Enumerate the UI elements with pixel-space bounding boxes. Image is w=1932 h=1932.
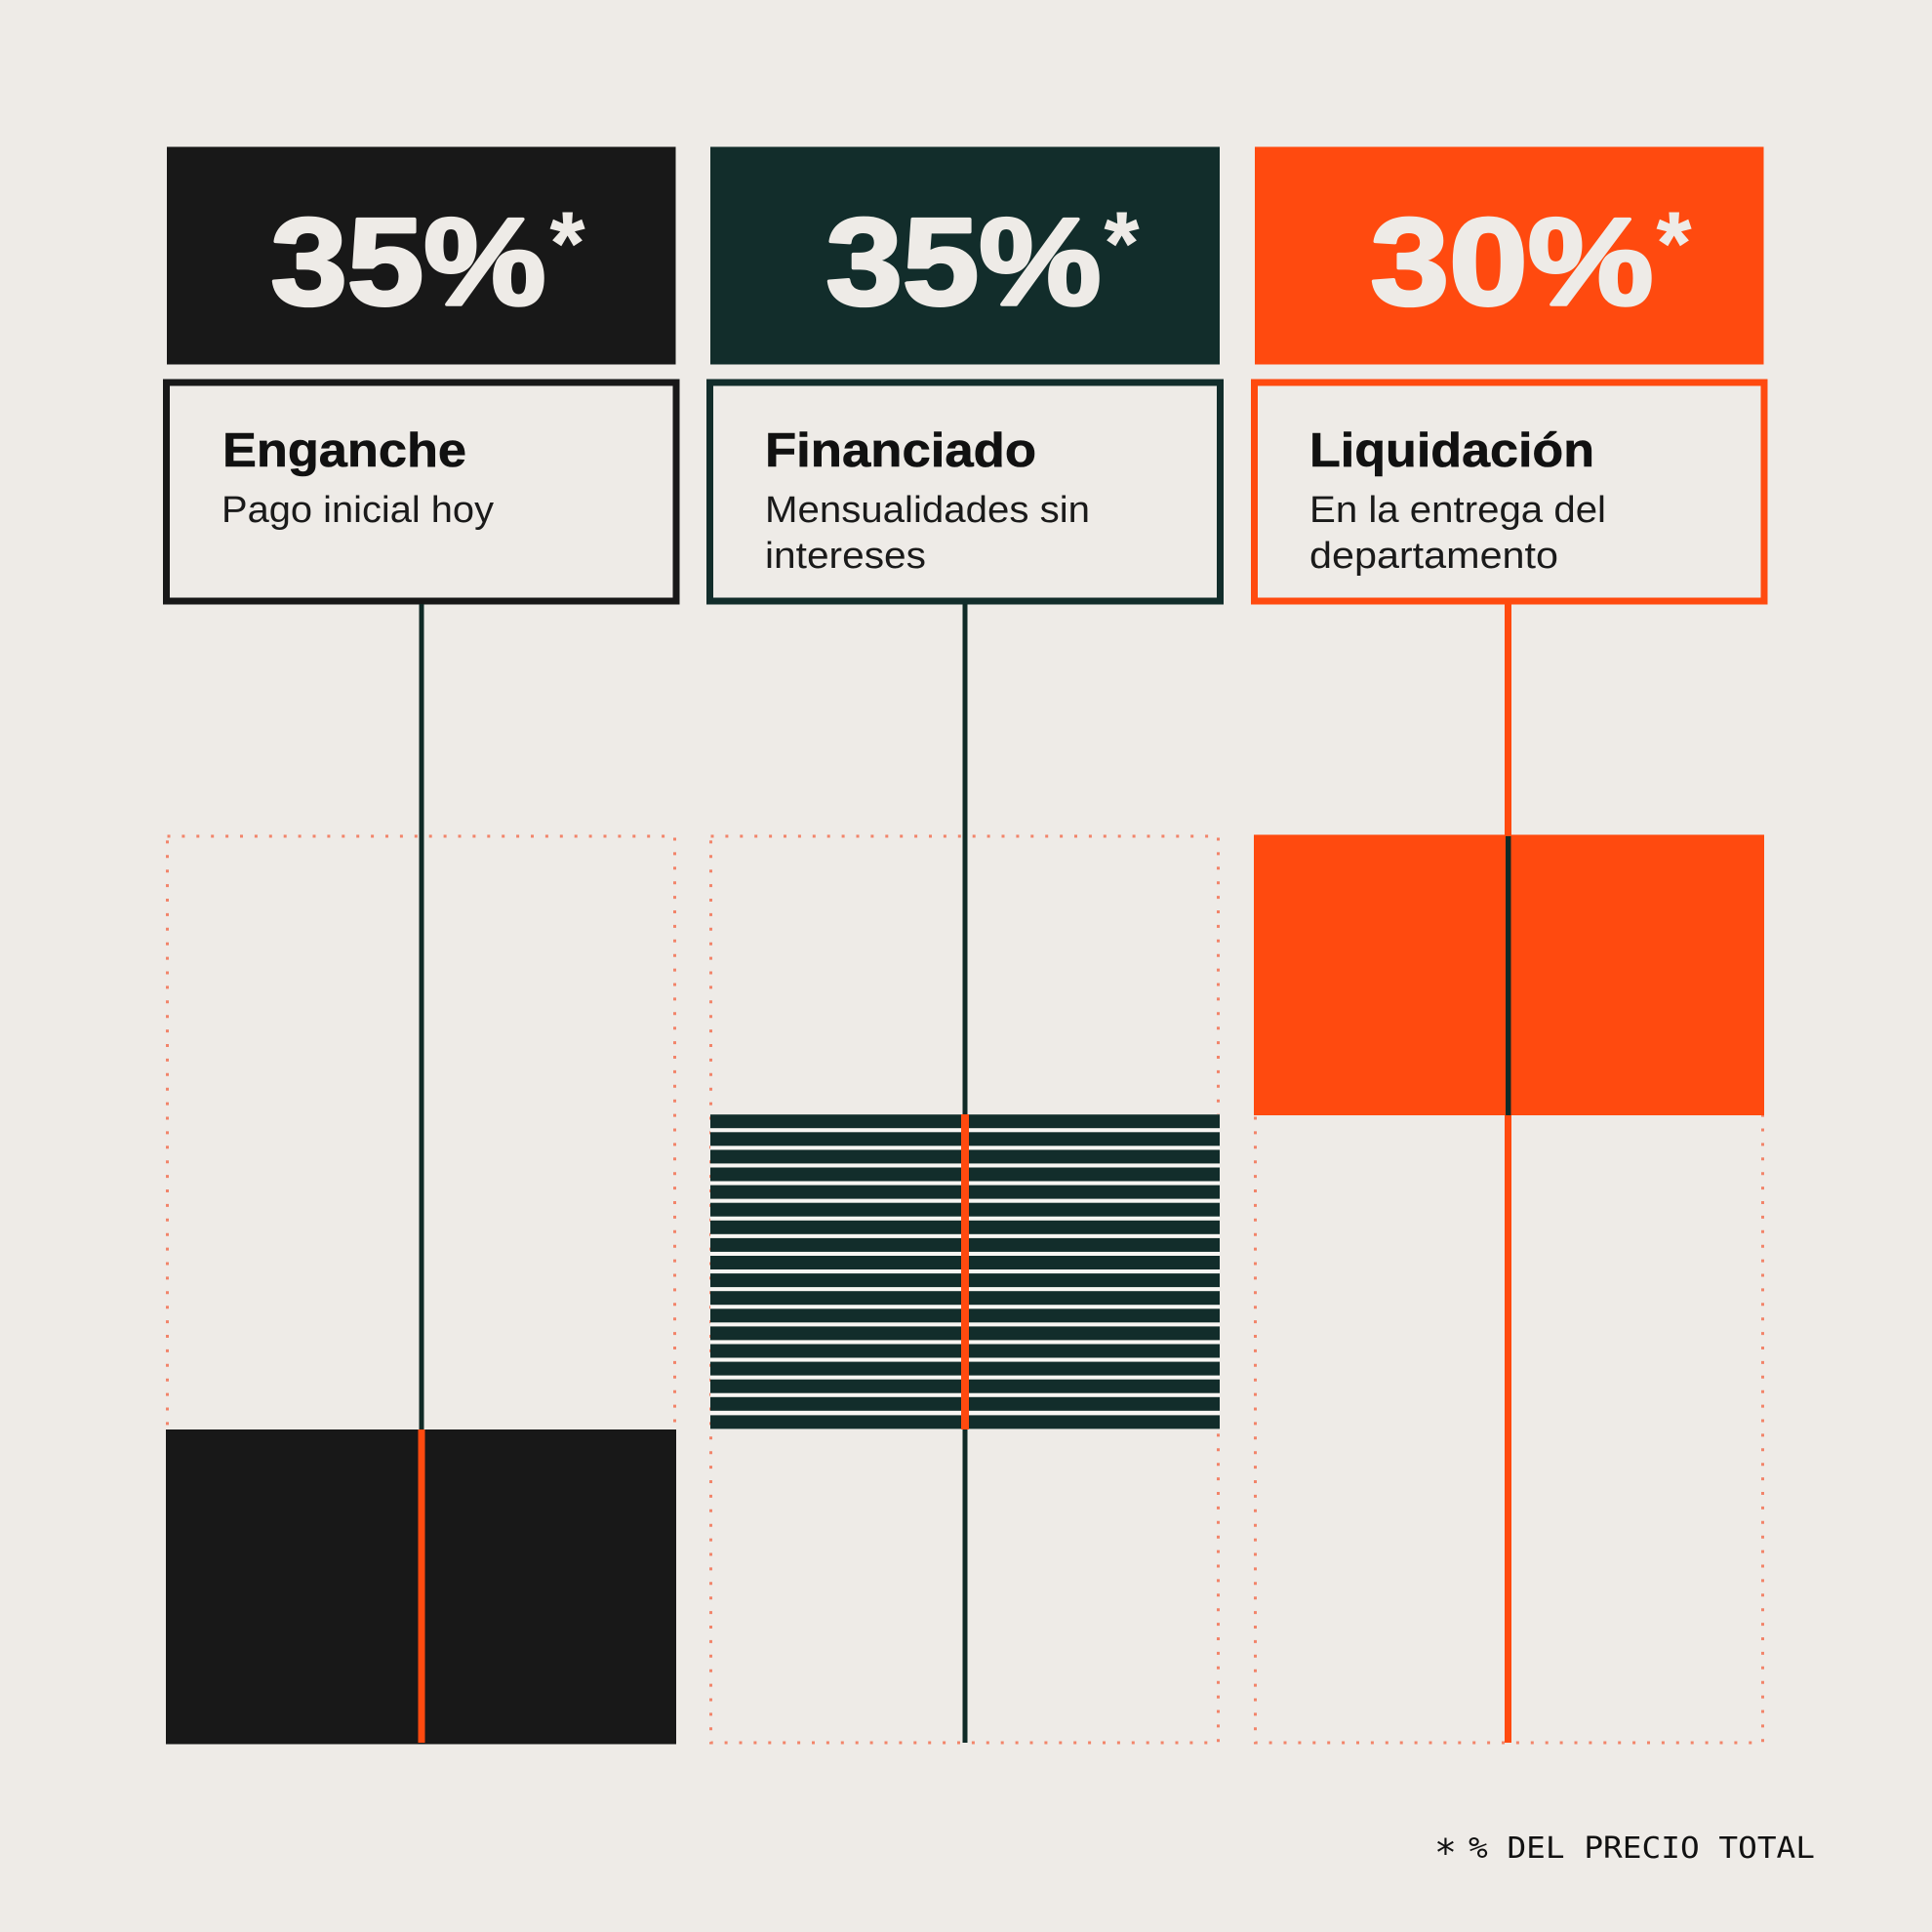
chart: Liquidación 30% bar [1254,604,1764,1743]
percentage header: 30% [1255,146,1764,365]
percentage header: 35%: 35% [825,192,1101,331]
footnote [1434,1831,1815,1874]
label box: Liquidación: En la entrega del [1309,490,1606,531]
percentage header: 30%: 30% [1370,192,1653,331]
label box: Financiado [710,382,1220,601]
label box: Liquidación: departamento [1309,536,1558,577]
label box: Liquidación [1255,382,1764,601]
percentage header: 35% [710,146,1220,365]
percentage header: 35%: * [550,195,584,293]
footnote: * [1434,1831,1457,1874]
label box: Enganche: Enganche [222,424,466,477]
percentage header: 35%: * [1105,195,1139,293]
column: Enganche [166,146,676,1745]
label box: Financiado: Mensualidades sin [765,490,1090,531]
label box: Enganche [166,382,676,601]
chart: Enganche 35% bar [166,604,676,1745]
percentage header: 35%: 35% [271,192,546,331]
label box: Liquidación: Liquidación [1309,424,1594,477]
label box: Financiado: Financiado [765,424,1036,477]
percentage header: 35% [167,146,675,365]
column: Financiado [710,146,1220,1743]
column: Liquidación [1254,146,1764,1743]
percentage header: 30%: * [1657,195,1691,293]
label box: Enganche: Pago inicial hoy [221,490,494,531]
label box: Financiado: intereses [765,536,926,577]
chart: Financiado 35% striped bar [710,604,1220,1743]
footnote: % DEL PRECIO TOTAL [1469,1831,1815,1866]
